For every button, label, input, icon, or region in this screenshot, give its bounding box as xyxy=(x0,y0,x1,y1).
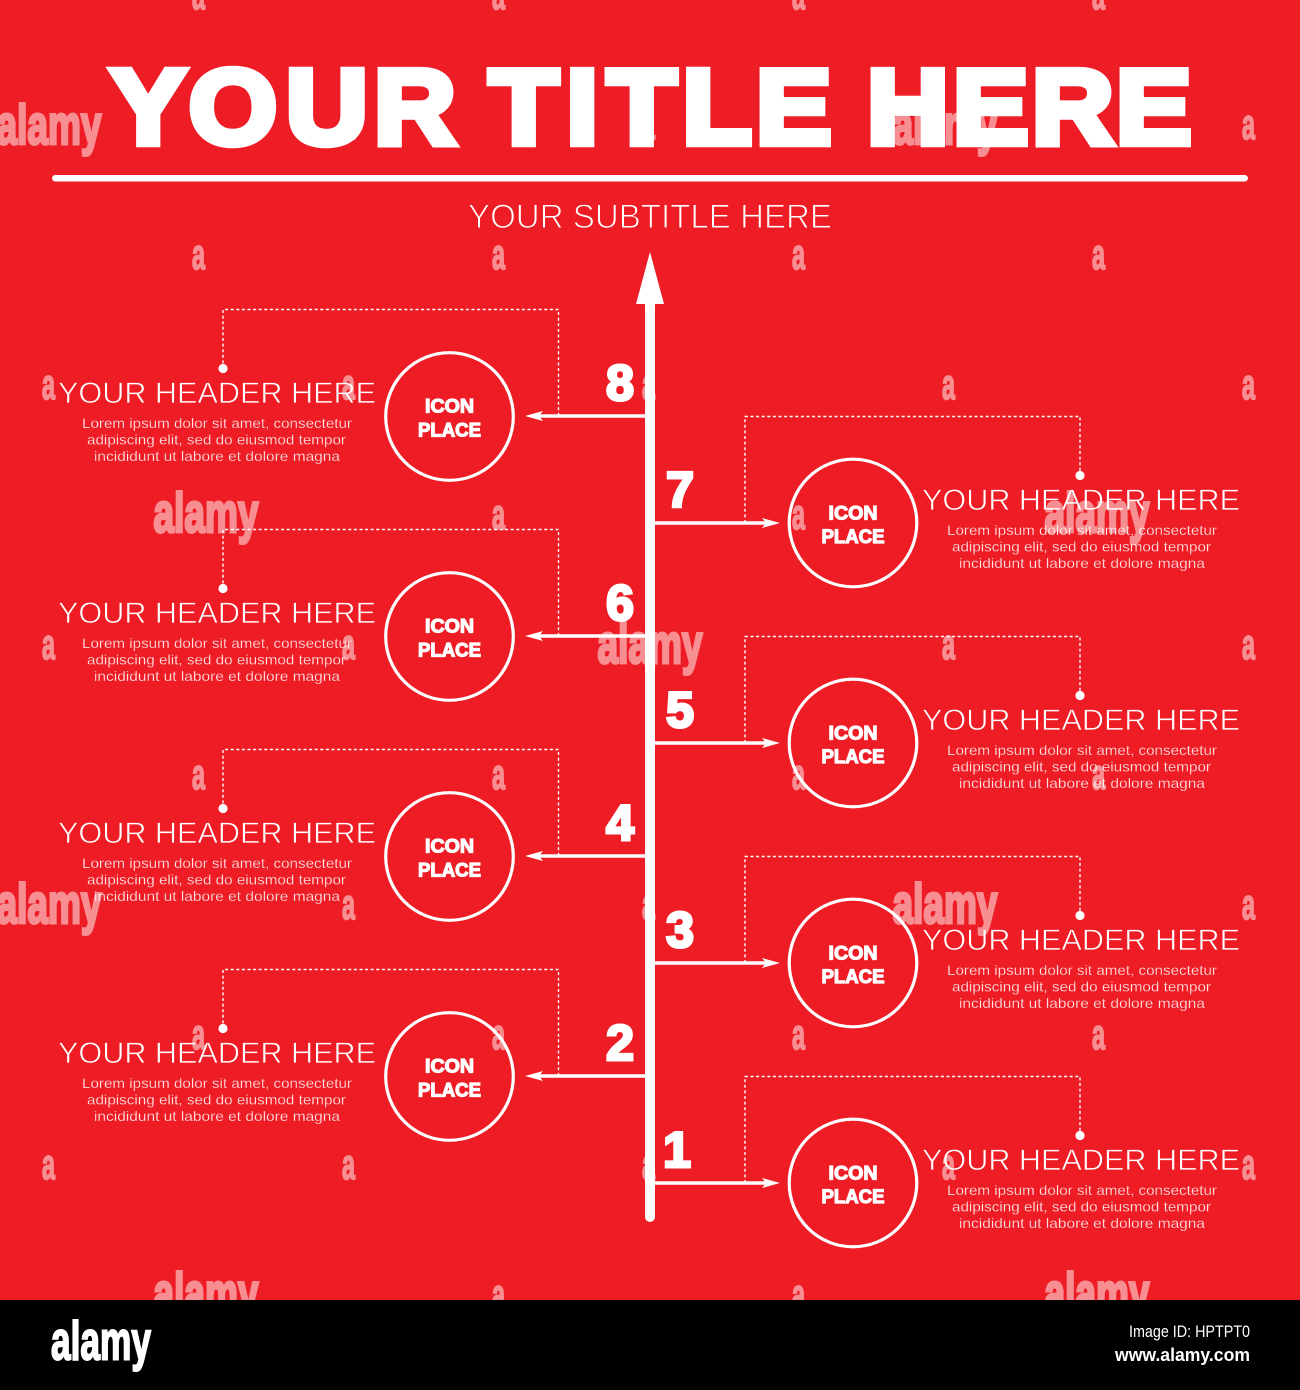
stock photo watermarks: a xyxy=(1242,621,1256,669)
icon placeholder 5 xyxy=(789,679,917,807)
number 5: 5 xyxy=(666,682,694,738)
stock photo watermarks: a xyxy=(942,621,956,669)
body text 7: incididunt ut labore et dolore magna xyxy=(959,555,1205,571)
stock photo watermarks: a xyxy=(942,1141,956,1189)
website: www.alamy.com xyxy=(1114,1345,1250,1365)
body text 2: Lorem ipsum dolor sit amet, consectetur xyxy=(82,1075,352,1091)
stock photo watermarks: a xyxy=(1242,361,1256,409)
stock photo watermarks: a xyxy=(1092,1011,1106,1059)
number 4: 4 xyxy=(606,795,634,851)
stock photo watermarks: alamy xyxy=(0,872,102,935)
stock photo watermarks: a xyxy=(792,231,806,279)
icon placeholder 3: ICON xyxy=(828,942,878,964)
stock photo watermarks: a xyxy=(492,231,506,279)
arrow 6 xyxy=(525,631,645,641)
stock photo watermarks: a xyxy=(792,1011,806,1059)
stock photo watermarks: a xyxy=(192,1011,206,1059)
body text 3 xyxy=(947,962,1217,1011)
stock photo watermarks: a xyxy=(1242,881,1256,929)
stock photo watermarks: a xyxy=(192,751,206,799)
icon placeholder 8: PLACE xyxy=(418,420,481,442)
stock photo watermarks: alamy xyxy=(598,612,702,675)
stock photo watermarks: a xyxy=(1242,101,1256,149)
header 4: YOUR HEADER HERE xyxy=(58,817,376,850)
stock photo watermarks: a xyxy=(642,1141,656,1189)
body text 1: incididunt ut labore et dolore magna xyxy=(959,1215,1205,1231)
icon placeholder 7 xyxy=(789,459,917,587)
arrow 2 xyxy=(525,1071,645,1081)
stock photo watermarks: alamy xyxy=(154,1261,258,1324)
body text 5: Lorem ipsum dolor sit amet, consectetur xyxy=(947,742,1217,758)
icon placeholder 3: PLACE xyxy=(822,966,884,988)
body text 4: Lorem ipsum dolor sit amet, consectetur xyxy=(82,855,352,871)
body text 5 xyxy=(947,742,1217,791)
icon placeholder 8: ICON xyxy=(425,396,474,418)
icon placeholder 6 xyxy=(386,573,513,700)
icon placeholder 7: PLACE xyxy=(822,526,884,548)
title: YOUR TITLE HERE xyxy=(110,49,1191,166)
stock photo watermarks: a xyxy=(792,751,806,799)
icon placeholder 4: ICON xyxy=(425,836,474,858)
body text 8: adipiscing elit, sed do eiusmod tempor xyxy=(87,432,346,448)
body text 2: adipiscing elit, sed do eiusmod tempor xyxy=(87,1092,346,1108)
stock photo watermarks: a xyxy=(42,1141,56,1189)
stock photo watermarks: alamy xyxy=(0,93,102,156)
step 8 xyxy=(58,310,645,480)
step 3 xyxy=(655,856,1240,1027)
stock photo watermarks: a xyxy=(492,1011,506,1059)
arrow 4 xyxy=(525,851,645,861)
body text 8: Lorem ipsum dolor sit amet, consectetur xyxy=(82,415,352,431)
body text 4 xyxy=(82,855,352,904)
stock photo watermarks: a xyxy=(192,231,206,279)
footer bar xyxy=(0,1300,1300,1390)
number 2: 2 xyxy=(606,1015,634,1071)
number 6: 6 xyxy=(606,575,634,631)
arrow 3 xyxy=(655,958,780,968)
body text 6: Lorem ipsum dolor sit amet, consectetur xyxy=(82,635,352,651)
body text 7: adipiscing elit, sed do eiusmod tempor xyxy=(952,538,1211,554)
stock photo watermarks: a xyxy=(792,1271,806,1319)
body text 1: adipiscing elit, sed do eiusmod tempor xyxy=(952,1198,1211,1214)
body text 3: Lorem ipsum dolor sit amet, consectetur xyxy=(947,962,1217,978)
body text 6: incididunt ut labore et dolore magna xyxy=(94,668,340,684)
header 1: YOUR HEADER HERE xyxy=(922,1144,1240,1177)
icon placeholder 6: ICON xyxy=(425,616,474,638)
body text 3: adipiscing elit, sed do eiusmod tempor xyxy=(952,978,1211,994)
body text 2 xyxy=(82,1075,352,1124)
stock photo watermarks: a xyxy=(492,491,506,539)
step 4 xyxy=(58,750,645,920)
step 7 xyxy=(655,416,1240,587)
body text 5: incididunt ut labore et dolore magna xyxy=(959,775,1205,791)
number 1: 1 xyxy=(663,1122,691,1178)
stock photo watermarks: a xyxy=(342,1141,356,1189)
icon placeholder 2: PLACE xyxy=(418,1080,481,1102)
icon placeholder 7: ICON xyxy=(828,502,878,524)
header 6: YOUR HEADER HERE xyxy=(58,597,376,630)
stock photo watermarks: a xyxy=(942,361,956,409)
subtitle: YOUR SUBTITLE HERE xyxy=(468,198,832,236)
icon placeholder 5: PLACE xyxy=(822,746,884,768)
body text 4: adipiscing elit, sed do eiusmod tempor xyxy=(87,872,346,888)
stock photo watermarks: a xyxy=(42,361,56,409)
stock photo watermarks: a xyxy=(642,361,656,409)
header 8: YOUR HEADER HERE xyxy=(58,377,376,410)
arrow 8 xyxy=(525,411,645,421)
number 3: 3 xyxy=(666,902,694,958)
icon placeholder 8 xyxy=(386,353,513,480)
stock photo watermarks: a xyxy=(342,881,356,929)
body text 7: Lorem ipsum dolor sit amet, consectetur xyxy=(947,522,1217,538)
stock photo watermarks: a xyxy=(1092,751,1106,799)
stock photo watermarks: alamy xyxy=(1044,1261,1150,1324)
header 7: YOUR HEADER HERE xyxy=(922,484,1240,517)
stock photo watermarks: a xyxy=(492,751,506,799)
image id: Image ID: HPTPT0 xyxy=(1129,1322,1250,1341)
step 1 xyxy=(655,1076,1240,1247)
icon placeholder 1 xyxy=(789,1119,917,1247)
stock photo watermarks: a xyxy=(42,621,56,669)
icon placeholder 3 xyxy=(789,899,917,1027)
number 8: 8 xyxy=(606,355,634,411)
stock photo watermarks: alamy xyxy=(892,872,998,935)
central timeline arrow xyxy=(636,252,664,1222)
body text 4: incididunt ut labore et dolore magna xyxy=(94,888,340,904)
header 3: YOUR HEADER HERE xyxy=(922,924,1240,957)
step 2 xyxy=(58,970,645,1140)
body text 1 xyxy=(947,1182,1217,1231)
header 2: YOUR HEADER HERE xyxy=(58,1037,376,1070)
step 5 xyxy=(655,636,1240,807)
footer logo: alamy xyxy=(51,1310,151,1372)
icon placeholder 1: ICON xyxy=(828,1162,878,1184)
stock photo watermarks: a xyxy=(342,361,356,409)
arrow 7 xyxy=(655,518,780,528)
body text 2: incididunt ut labore et dolore magna xyxy=(94,1108,340,1124)
title divider rule xyxy=(52,175,1248,182)
icon placeholder 5: ICON xyxy=(828,722,878,744)
body text 6: adipiscing elit, sed do eiusmod tempor xyxy=(87,652,346,668)
stock photo watermarks: alamy xyxy=(154,481,258,544)
icon placeholder 1: PLACE xyxy=(822,1186,884,1208)
body text 1: Lorem ipsum dolor sit amet, consectetur xyxy=(947,1182,1217,1198)
stock photo watermarks: a xyxy=(342,621,356,669)
icon placeholder 2: ICON xyxy=(425,1056,474,1078)
stock photo watermarks: alamy xyxy=(892,93,998,156)
icon placeholder 4: PLACE xyxy=(418,860,481,882)
body text 8: incididunt ut labore et dolore magna xyxy=(94,448,340,464)
icon placeholder 2 xyxy=(386,1013,513,1140)
stock photo watermarks: a xyxy=(342,101,356,149)
stock photo watermarks: a xyxy=(1242,1141,1256,1189)
body text 8 xyxy=(82,415,352,464)
stock photo watermarks: alamy xyxy=(1044,481,1150,544)
body text 3: incididunt ut labore et dolore magna xyxy=(959,995,1205,1011)
header 5: YOUR HEADER HERE xyxy=(922,704,1240,737)
stock photo watermarks: a xyxy=(642,881,656,929)
icon placeholder 6: PLACE xyxy=(418,640,481,662)
body text 6 xyxy=(82,635,352,684)
step 6 xyxy=(58,530,645,700)
arrow 1 xyxy=(655,1178,780,1188)
number 7: 7 xyxy=(666,462,694,518)
stock photo watermarks: a xyxy=(492,1271,506,1319)
body text 5: adipiscing elit, sed do eiusmod tempor xyxy=(952,758,1211,774)
stock photo watermarks: a xyxy=(642,101,656,149)
icon placeholder 4 xyxy=(386,793,513,920)
body text 7 xyxy=(947,522,1217,571)
stock photo watermarks: a xyxy=(792,491,806,539)
arrow 5 xyxy=(655,738,780,748)
stock photo watermarks: a xyxy=(1092,231,1106,279)
